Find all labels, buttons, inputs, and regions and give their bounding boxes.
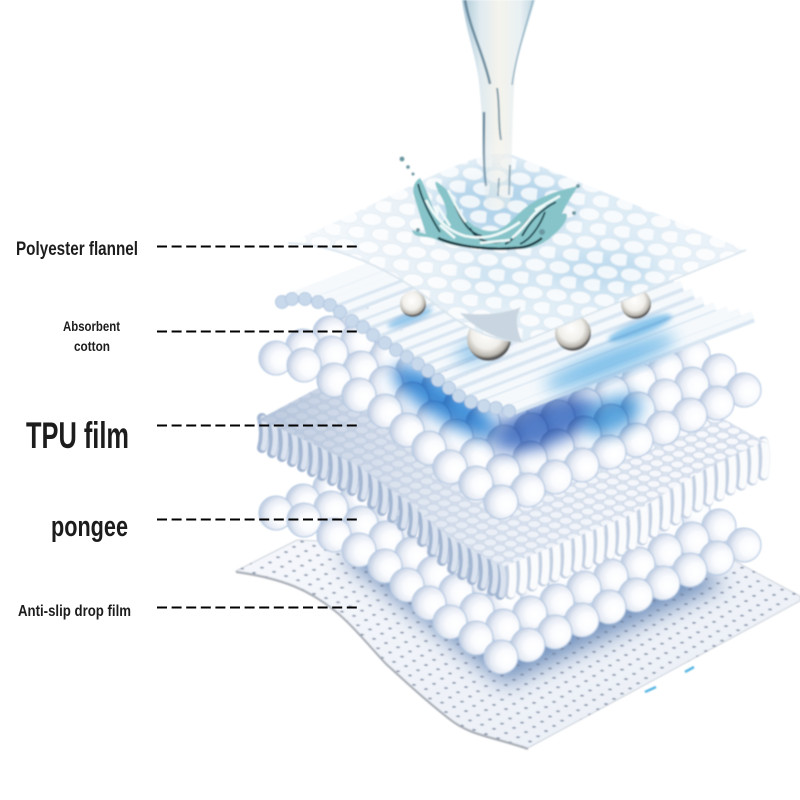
illustration: stacked layers <box>230 0 800 755</box>
tube ends <box>276 292 516 418</box>
label: Absorbent cotton: cotton <box>74 338 110 354</box>
layer: anti-slip drop film sheet <box>234 539 800 750</box>
layer: absorbent spheres with blue stain <box>259 304 761 519</box>
water splash <box>400 157 580 250</box>
label: pongee: pongee <box>51 511 128 543</box>
mesh ribs: left side <box>262 418 504 595</box>
layer: polyester flannel top sheet <box>288 154 746 343</box>
water beads <box>400 289 651 361</box>
tube blue stain <box>386 305 680 398</box>
leader: Anti-slip drop film <box>157 606 357 608</box>
layer: TPU film ribbed mesh <box>258 300 770 595</box>
leader: TPU film <box>157 424 357 426</box>
leader: Polyester flannel <box>157 246 357 248</box>
label: Absorbent cotton <box>63 318 120 354</box>
leader: Absorbent cotton <box>157 330 357 332</box>
folded corner <box>460 307 522 342</box>
label: Anti-slip drop film: Anti-slip drop film <box>18 603 131 620</box>
mesh top surface <box>258 300 770 567</box>
mesh ribs: right side <box>510 442 766 594</box>
splash droplets <box>400 157 580 235</box>
layer: pongee spheres <box>259 459 761 674</box>
label: Polyester flannel: Polyester flannel <box>16 239 138 260</box>
label: Absorbent cotton: Absorbent <box>63 318 120 334</box>
layer: absorbent cotton tubes <box>276 203 753 418</box>
label: TPU film: TPU film <box>26 415 129 456</box>
water stream <box>462 0 535 208</box>
leader: pongee <box>157 518 357 520</box>
